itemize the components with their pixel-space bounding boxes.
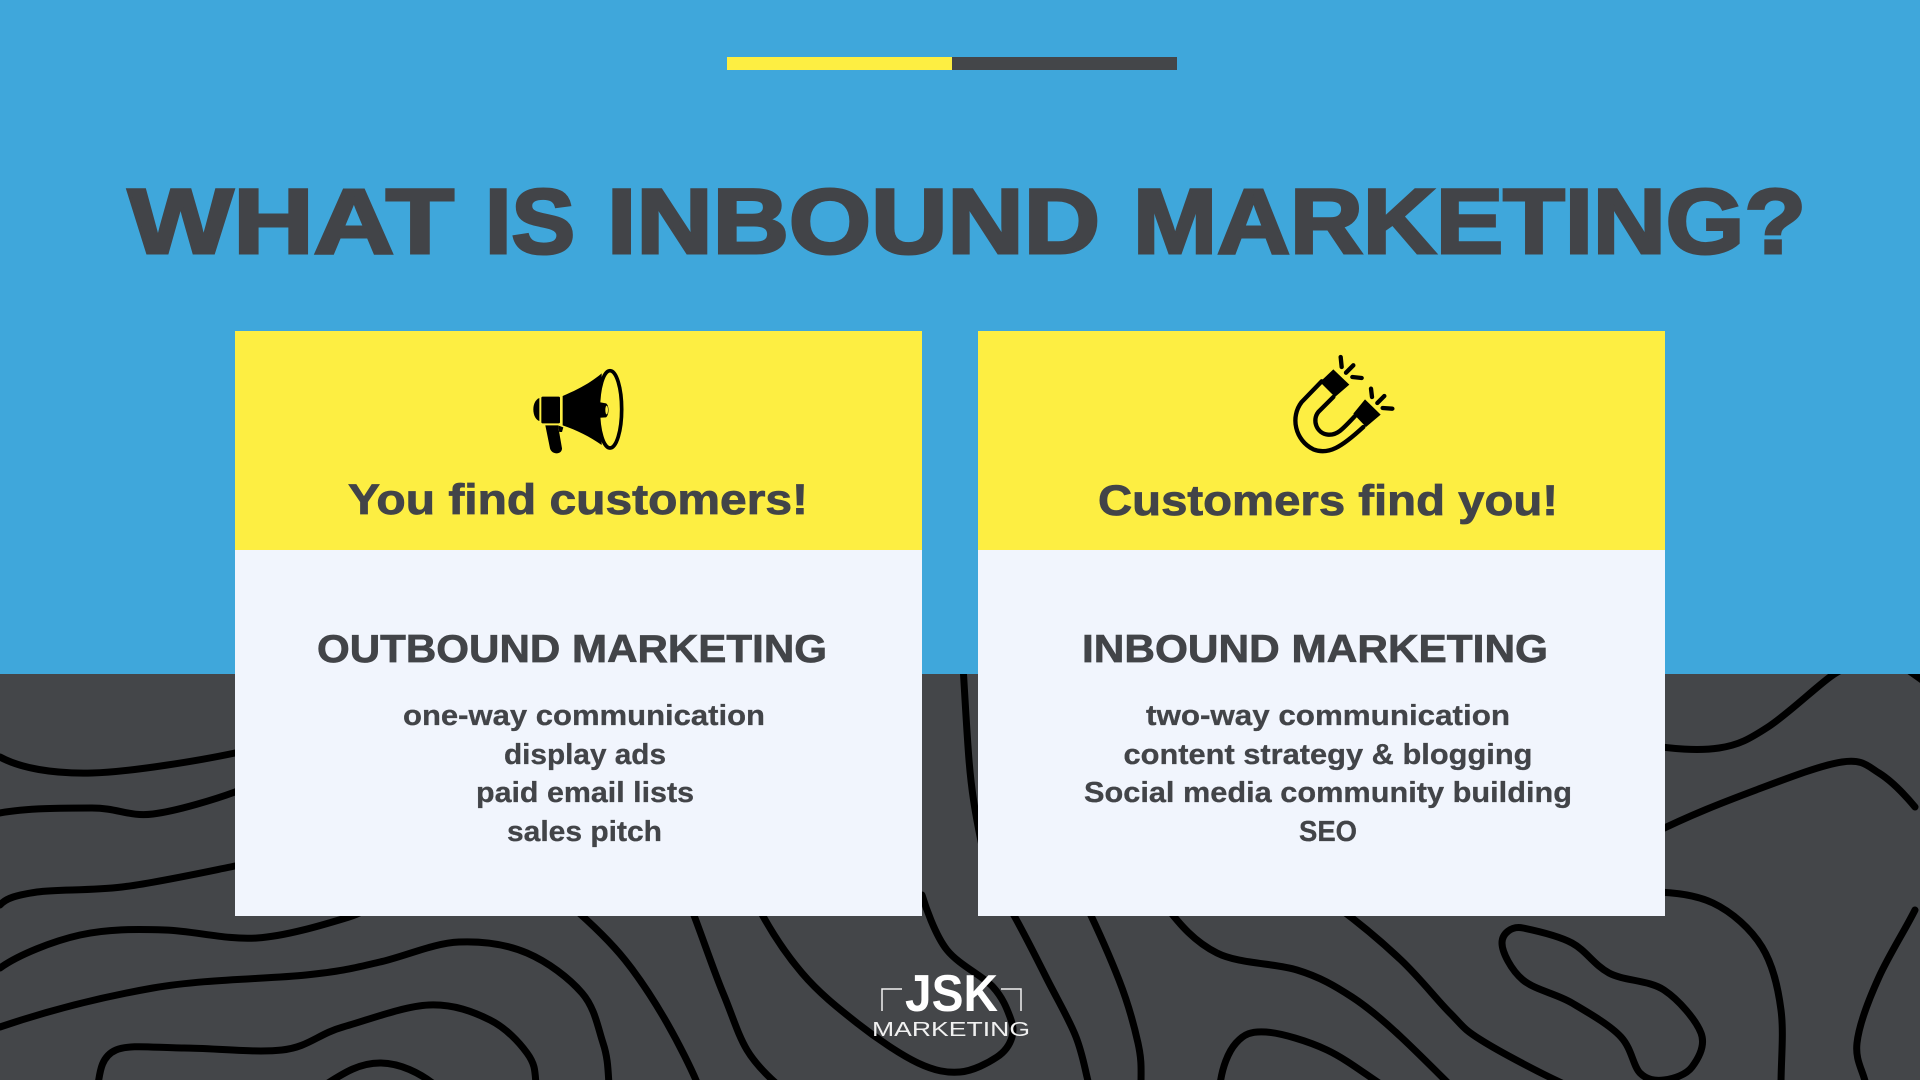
title: INBOUND <box>607 171 1100 273</box>
card heading: customers find you: Customers find you! <box>1098 477 1558 525</box>
icon: megaphone <box>533 371 622 453</box>
blue top background panel <box>0 0 1920 674</box>
list: inbound items: SEO <box>1299 816 1357 848</box>
list: outbound items: one-way communication <box>403 700 765 732</box>
title: MARKETING? <box>1133 171 1806 273</box>
title <box>128 171 1806 273</box>
card header: yellow <box>978 331 1665 550</box>
panel: outbound marketing <box>235 331 922 916</box>
list: inbound items: content strategy & blogging <box>1124 739 1532 771</box>
icon: magnet <box>1295 357 1392 451</box>
title: WHAT <box>128 171 454 273</box>
list: inbound items: two-way communication <box>1146 700 1510 732</box>
logo wordmark: JSK <box>905 965 998 1023</box>
section heading: outbound marketing: OUTBOUND MARKETING <box>317 628 827 671</box>
card heading: you find customers: You find customers! <box>348 476 808 524</box>
dark background panel with contour lines <box>0 660 1920 1080</box>
list: inbound items: Social media community building <box>1084 777 1572 809</box>
logo: JSK Marketing <box>872 965 1030 1041</box>
panel: inbound marketing <box>978 331 1665 916</box>
card header: yellow <box>235 331 922 550</box>
section heading: inbound marketing: INBOUND MARKETING <box>1082 628 1548 671</box>
logo subtitle: MARKETING <box>872 1019 1030 1041</box>
progress bar accent <box>727 57 1177 70</box>
card body: light <box>978 550 1665 916</box>
list: outbound items <box>403 700 765 848</box>
list: outbound items: paid email lists <box>476 777 694 809</box>
list: outbound items: display ads <box>504 739 666 771</box>
list: inbound items <box>1084 700 1572 848</box>
logo brackets <box>882 989 1021 1011</box>
card body: light <box>235 550 922 916</box>
list: outbound items: sales pitch <box>507 816 662 848</box>
title: IS <box>485 171 575 273</box>
